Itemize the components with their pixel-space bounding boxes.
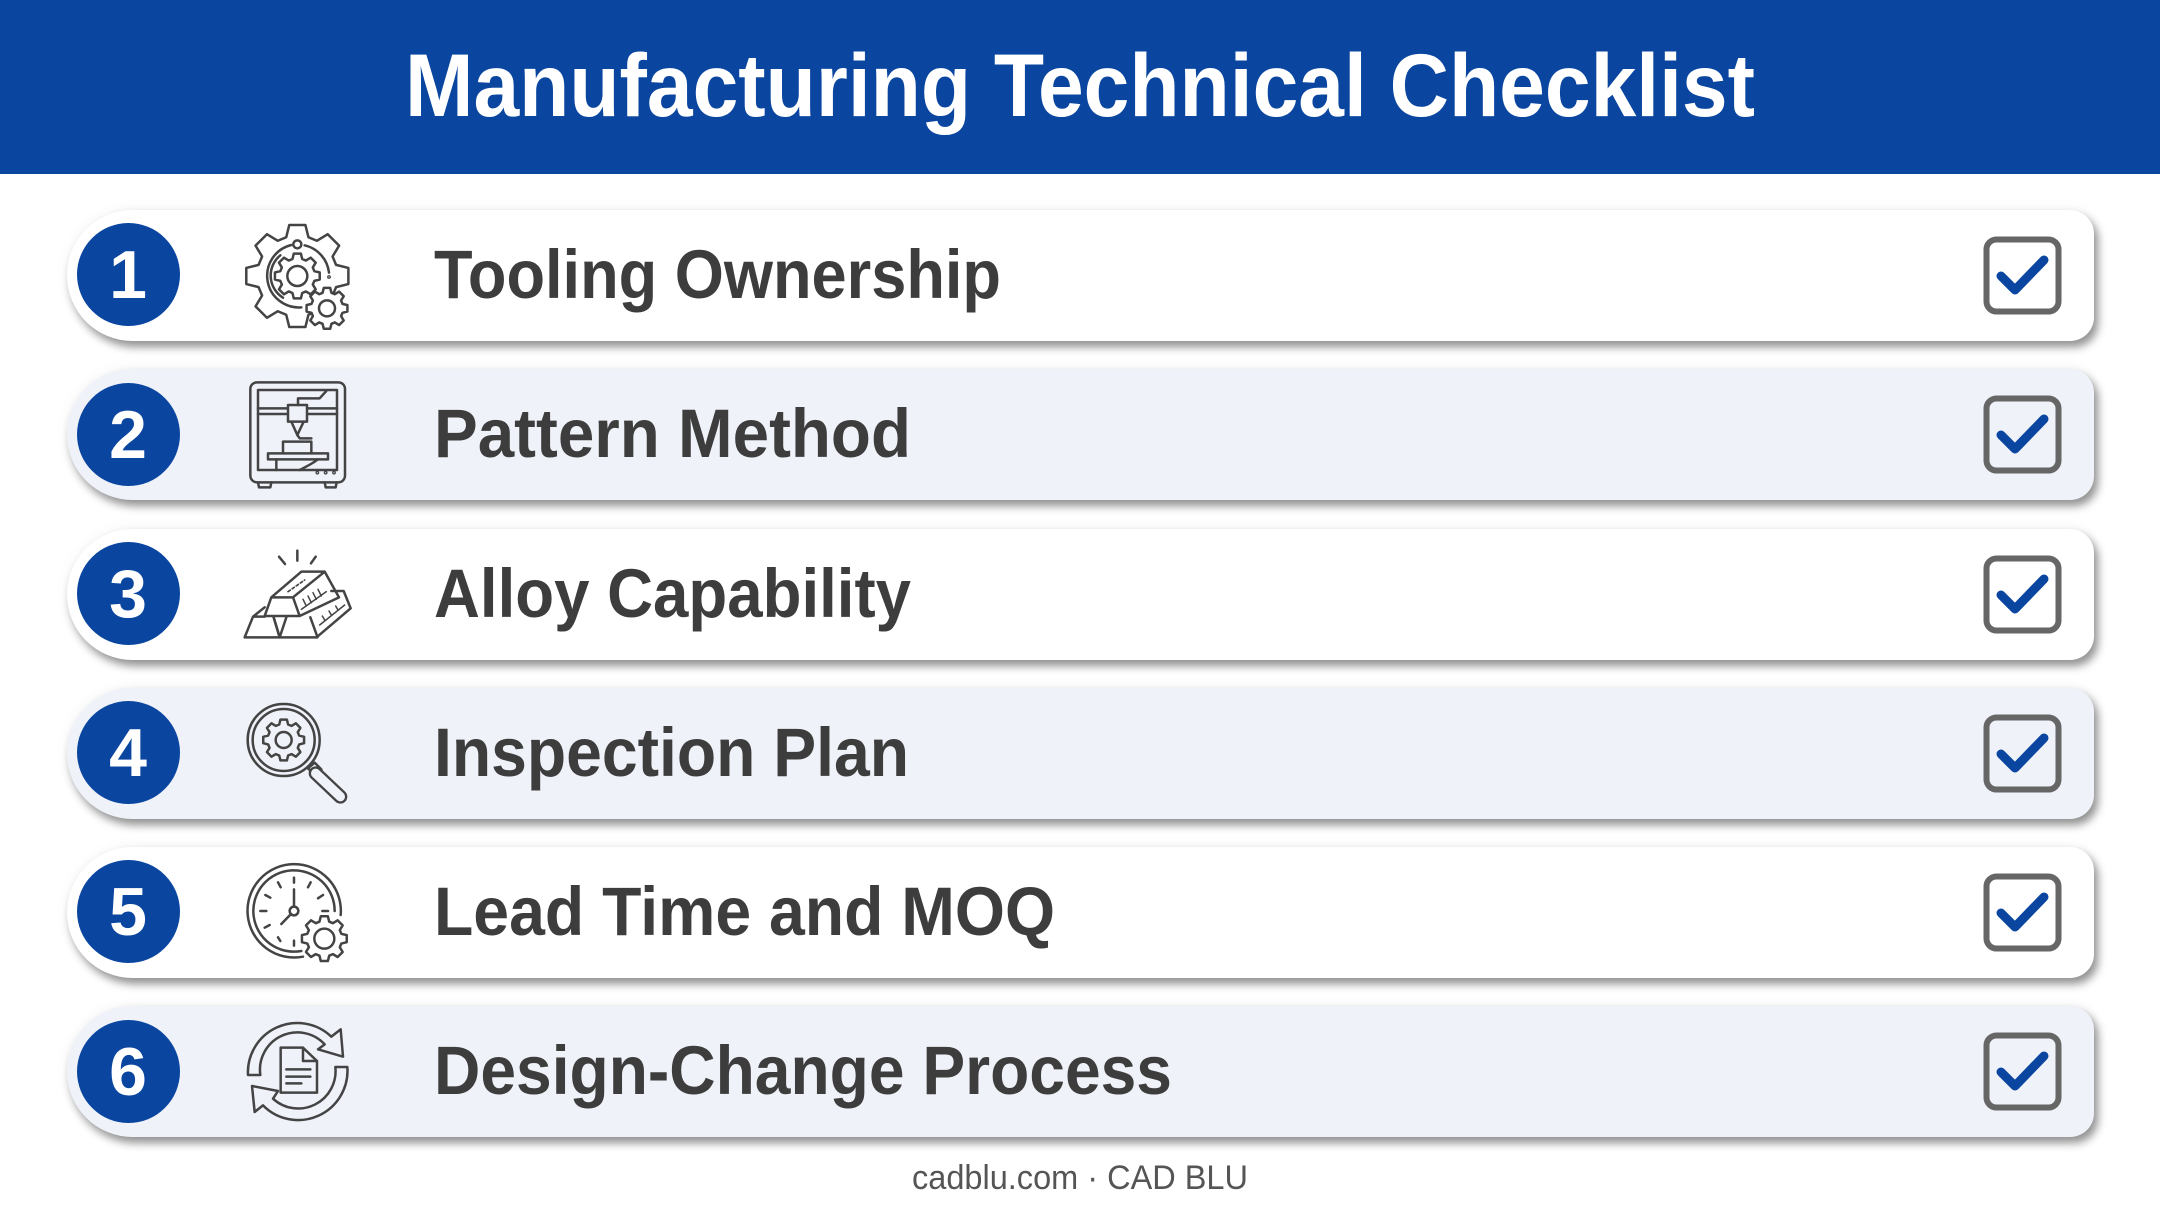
label: Alloy Capability bbox=[434, 554, 911, 632]
header banner bbox=[0, 0, 2160, 174]
title: Manufacturing Technical Checklist bbox=[405, 35, 1755, 135]
panel: row 4 inspection plan bbox=[67, 688, 2094, 818]
number badge 2 bbox=[77, 383, 180, 486]
number badge 5 bbox=[77, 860, 180, 963]
label: Design-Change Process bbox=[434, 1032, 1172, 1109]
number badge 3: 3 bbox=[109, 556, 147, 632]
icon: clock with gear bbox=[246, 862, 348, 962]
footer credit: cadblu.com · CAD BLU bbox=[912, 1159, 1248, 1197]
icon: magnifier with gear bbox=[246, 702, 348, 804]
number badge 4: 4 bbox=[109, 715, 147, 791]
number badge 4 bbox=[77, 701, 180, 804]
icon: 3d printer bbox=[249, 381, 346, 489]
checkbox bbox=[1984, 396, 2062, 474]
checkbox bbox=[1984, 556, 2062, 634]
icon: document with cycle arrows bbox=[246, 1022, 349, 1122]
panel: row 6 design-change process bbox=[67, 1006, 2094, 1137]
number badge 1: 1 bbox=[109, 237, 147, 313]
checkbox bbox=[1984, 714, 2062, 792]
number badge 6 bbox=[77, 1020, 180, 1123]
label: Pattern Method bbox=[434, 395, 911, 472]
number badge 1 bbox=[77, 223, 180, 326]
checkbox bbox=[1984, 236, 2062, 314]
icon: gears bbox=[245, 224, 350, 330]
label: Lead Time and MOQ bbox=[434, 872, 1055, 950]
label: Tooling Ownership bbox=[434, 236, 1001, 312]
number badge 3 bbox=[77, 542, 180, 645]
panel: row 1 tooling ownership bbox=[67, 210, 2094, 340]
panel: row 3 alloy capability bbox=[67, 528, 2094, 660]
panel: row 5 lead time and moq bbox=[67, 846, 2094, 978]
panel: row 2 pattern method bbox=[67, 369, 2094, 500]
label: Inspection Plan bbox=[434, 714, 909, 790]
number badge 6: 6 bbox=[109, 1034, 147, 1110]
number badge 5: 5 bbox=[109, 874, 147, 950]
checkbox bbox=[1984, 874, 2062, 952]
icon: metal ingots bbox=[243, 549, 352, 639]
checkbox bbox=[1984, 1032, 2062, 1110]
number badge 2: 2 bbox=[109, 396, 147, 472]
